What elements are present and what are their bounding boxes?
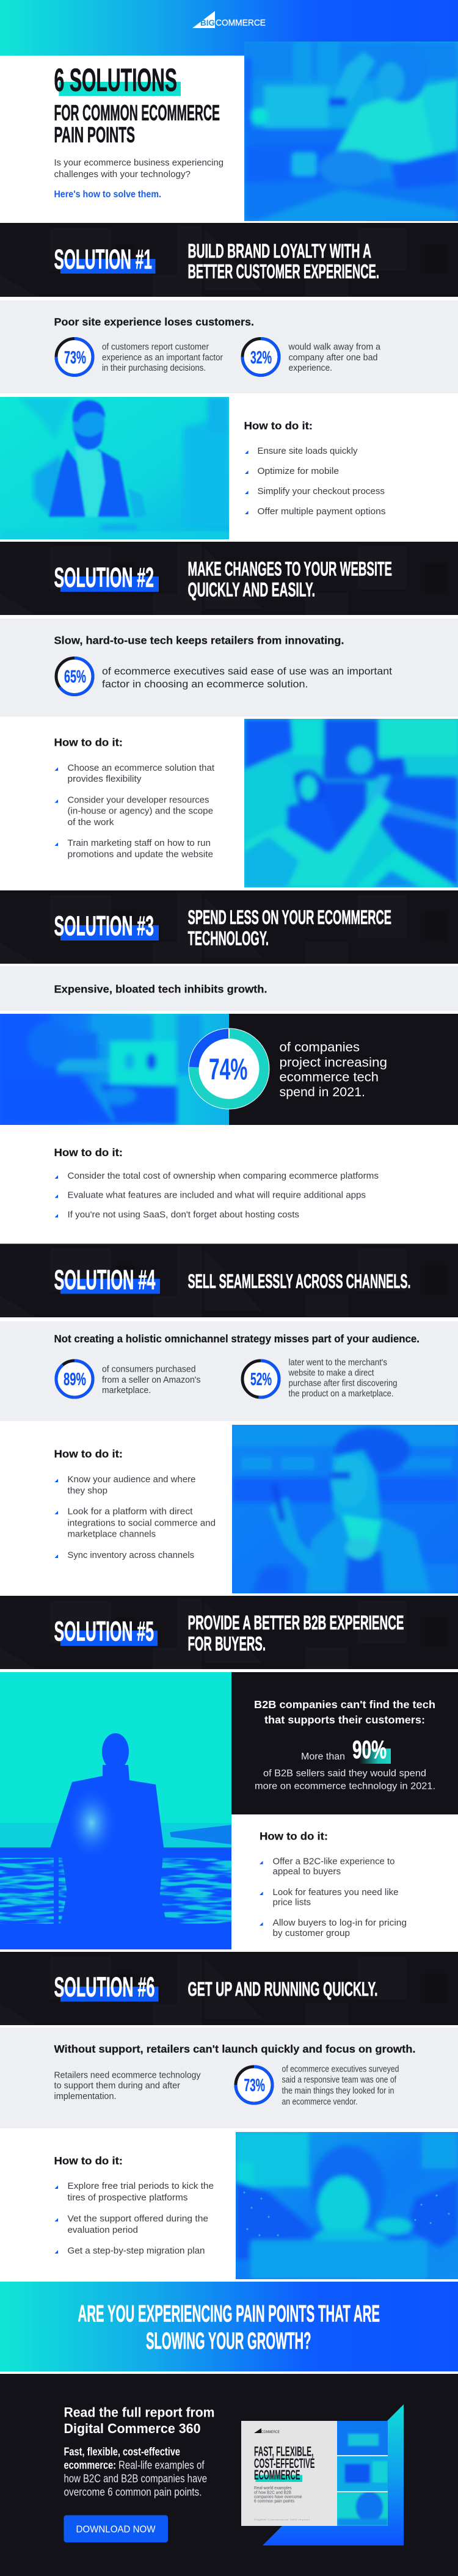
bullet list: Vet the support offered during the — [67, 2213, 208, 2224]
bullet list — [55, 1474, 216, 1560]
bullet list: they shop — [67, 1485, 107, 1496]
bullet list: (in-house or agency) and the scope — [67, 806, 213, 816]
bullet list: marketplace channels — [67, 1529, 156, 1539]
donut 73 percent: 73% — [244, 2076, 265, 2095]
arm — [244, 794, 391, 887]
cover title: FAST, FLEXIBLE, — [254, 2444, 314, 2459]
footer description: Fast, flexible, cost-effective — [64, 2445, 180, 2458]
bullet list: promotions and update the website — [67, 849, 213, 860]
highlight — [60, 1987, 159, 2002]
bullet list: provides flexibility — [67, 774, 142, 784]
header banner with logo — [0, 0, 458, 56]
solution 2 band — [0, 542, 458, 615]
panel heading: Expensive, bloated tech inhibits growth. — [54, 983, 267, 995]
bullet list: Ensure site loads quickly — [258, 446, 358, 456]
heading: How to do it: — [54, 1146, 123, 1159]
stat text 73: of customers report customer — [102, 342, 209, 352]
woman — [293, 771, 324, 807]
glow — [66, 1786, 117, 1860]
panel: how to do it 2 — [54, 737, 215, 860]
stat text: more on ecommerce technology in 2021. — [255, 1781, 435, 1792]
donut 74 percent: 74% — [209, 1053, 248, 1086]
stat text 52: later went to the merchant's — [288, 1357, 387, 1368]
bullet list: Consider your developer resources — [67, 795, 209, 805]
highlight — [60, 259, 155, 274]
footer description: how B2C and B2B companies have — [64, 2472, 207, 2484]
more than: More than — [301, 1752, 345, 1762]
bullet list: by customer group — [272, 1928, 350, 1938]
donut 74 percent — [188, 1028, 270, 1109]
footer heading line 2: Digital Commerce 360 — [64, 2421, 200, 2436]
arm with phone — [269, 1496, 318, 1570]
heading: How to do it: — [54, 737, 123, 749]
face and hair — [333, 1450, 382, 1533]
download button: DOWNLOAD NOW — [76, 2525, 156, 2534]
band pattern — [0, 893, 446, 964]
icon: logo triangle — [192, 11, 215, 28]
stat text 89 — [102, 1364, 200, 1395]
report cover — [241, 2421, 388, 2526]
subtitle line 2: PAIN POINTS — [54, 122, 135, 147]
bullet list: Get a step-by-step migration plan — [67, 2246, 205, 2256]
stat text 52: the product on a marketplace. — [288, 1389, 393, 1399]
highlight — [60, 1279, 160, 1293]
panel heading: Without support, retailers can't launch quickly and focus on growth. — [54, 2043, 415, 2055]
solution 1 band — [0, 223, 458, 297]
stat panel: 74 percent — [188, 1014, 458, 1125]
stat text 52: purchase after first discovering — [288, 1378, 397, 1389]
stat text 32 — [288, 342, 381, 373]
dock — [170, 1825, 231, 1844]
bullet list: Optimize for mobile — [258, 466, 339, 476]
bullet list: Look for features you need like — [272, 1887, 398, 1897]
label: SOLUTION #2 — [54, 562, 154, 593]
man shirt — [336, 79, 458, 165]
cover title: ECOMMERCE — [254, 2467, 300, 2483]
band pattern — [0, 1598, 446, 1669]
intro paragraph line 2: challenges with your technology? — [54, 169, 191, 180]
stat text 74: project increasing — [280, 1055, 387, 1070]
footer panel — [0, 2374, 458, 2576]
solution 6 band — [0, 1952, 458, 2025]
heading: How to do it: — [54, 2155, 123, 2167]
download button — [64, 2515, 168, 2542]
stat text 89: marketplace. — [102, 1385, 151, 1395]
panel: expensive tech — [0, 966, 458, 1011]
bullet list: integrations to social commerce and — [67, 1518, 216, 1528]
footer description: Real-life examples of — [118, 2459, 205, 2471]
bullet list: Allow buyers to log-in for pricing — [272, 1918, 407, 1928]
heading line 2: that supports their customers: — [264, 1714, 425, 1726]
label: SOLUTION #5 — [54, 1616, 154, 1646]
panel heading: Poor site experience loses customers. — [54, 316, 254, 328]
band pattern — [0, 544, 446, 615]
footer description: ecommerce: — [64, 2459, 116, 2471]
sea texture — [0, 1858, 231, 1924]
cover highlight — [255, 2475, 302, 2482]
panel: how to do it 6 — [54, 2155, 214, 2256]
highlight — [60, 1631, 158, 1646]
photo: stressed man at desk — [244, 42, 458, 221]
label: SOLUTION #4 — [54, 1264, 155, 1295]
laptop — [250, 2240, 427, 2279]
cover photos — [337, 2421, 388, 2526]
donut 65 percent — [56, 658, 93, 695]
bullet list: price lists — [272, 1897, 311, 1908]
cover logo — [254, 2428, 261, 2433]
photo: person browsing laptop — [0, 1014, 229, 1125]
label: SOLUTION #6 — [54, 1971, 155, 2003]
heading: How to do it: — [54, 1447, 123, 1460]
cover title — [254, 2444, 315, 2483]
report backdrop — [263, 2404, 404, 2545]
heading line 2: TECHNOLOGY. — [188, 927, 269, 949]
donut 32 percent: 32% — [250, 348, 272, 368]
panel: support — [0, 2028, 458, 2128]
stat text 89: of consumers purchased — [102, 1364, 195, 1374]
cover subtitle — [254, 2486, 302, 2504]
background people — [348, 747, 373, 774]
bullet list — [245, 446, 386, 517]
bullet list: Offer multiple payment options — [258, 506, 386, 517]
hat — [335, 1427, 410, 1474]
stat text: of B2B sellers said they would spend — [263, 1769, 426, 1778]
bullet list: Train marketing staff on how to run — [67, 838, 211, 848]
stat text 32: company after one bad — [288, 352, 377, 363]
title: 6 SOLUTIONS — [54, 62, 177, 98]
solution 5 band — [0, 1596, 458, 1669]
call to action banner — [0, 2282, 458, 2371]
stat text 73: the main things they looked for in — [282, 2086, 394, 2096]
stat text 73 — [102, 342, 223, 373]
face — [318, 2176, 369, 2239]
logo BIG: BIG — [200, 18, 215, 27]
photo: woman with phone — [232, 1425, 458, 1593]
bullet list: Explore free trial periods to kick the — [67, 2181, 214, 2191]
bullet list: evaluation period — [67, 2225, 138, 2235]
body — [269, 2229, 427, 2279]
cover subtitle: companies have overcome — [254, 2495, 302, 2499]
stat text 32: would walk away from a — [288, 342, 381, 352]
shirt — [75, 446, 105, 517]
stat text 73: said a responsive team was one of — [282, 2075, 397, 2085]
stat text 65 — [102, 666, 392, 690]
bullet list — [55, 1171, 379, 1220]
cover subtitle: 6 common pain points — [254, 2499, 294, 2504]
donut 65 percent: 65% — [64, 667, 86, 686]
bullet list: Simplify your checkout process — [258, 486, 385, 497]
donut 73 percent — [236, 2067, 272, 2103]
90 percent: 90% — [352, 1735, 387, 1764]
stat text 74 — [280, 1041, 387, 1099]
stat text 73: in their purchasing decisions. — [102, 363, 206, 373]
donut 89 percent: 89% — [64, 1370, 86, 1389]
bullet list — [55, 2181, 214, 2256]
photo: man on phone — [0, 397, 229, 539]
head — [73, 402, 104, 447]
bullet list: Look for a platform with direct — [67, 1506, 193, 1517]
label: SOLUTION #1 — [54, 244, 152, 275]
label: SOLUTION #3 — [54, 910, 154, 942]
man head — [244, 757, 293, 843]
stat text 74: of companies — [280, 1041, 360, 1054]
title highlight — [59, 82, 181, 96]
stat text 52: website to make a direct — [288, 1368, 374, 1378]
band pattern — [0, 1246, 446, 1317]
donut 73 percent — [56, 338, 93, 375]
stat text 73: of ecommerce executives surveyed — [282, 2064, 399, 2074]
heading line 2: QUICKLY AND EASILY. — [188, 579, 315, 601]
rail — [0, 1847, 231, 1858]
bullet list: If you're not using SaaS, don't forget about hosting costs — [67, 1209, 299, 1220]
photo: people at computers — [244, 719, 458, 887]
panel: B2B stat — [231, 1672, 458, 1814]
heading line 2: FOR BUYERS. — [188, 1633, 266, 1655]
intro text — [54, 2070, 201, 2101]
heading: B2B companies can't find the tech — [254, 1698, 435, 1711]
stat text 74: ecommerce tech — [280, 1070, 379, 1085]
footer description: overcome 6 common pain points. — [64, 2486, 202, 2498]
bullet list: Consider the total cost of ownership when comparing ecommerce platforms — [67, 1171, 379, 1181]
highlight — [60, 577, 159, 592]
heading: How to do it: — [244, 420, 313, 432]
panel: how to do it 1 — [244, 420, 386, 517]
logo wordmark: COMMERCE — [216, 18, 266, 28]
bullet list: Offer a B2C-like experience to — [272, 1857, 394, 1866]
band pattern — [0, 225, 446, 296]
panel: poor site experience — [0, 300, 458, 393]
highlight — [60, 925, 159, 941]
panel: how to do it 4 — [54, 1447, 216, 1560]
bullet list — [55, 763, 215, 860]
cover subtitle: of how B2C and B2B — [254, 2490, 291, 2495]
hand — [319, 150, 383, 186]
report cover: COMMERCE — [261, 2431, 280, 2434]
donut 52 percent — [242, 1361, 279, 1397]
hair — [311, 2145, 385, 2233]
bullet list: Choose an ecommerce solution that — [67, 763, 215, 773]
cover title: COST-EFFECTIVE — [254, 2456, 315, 2471]
bullet list: Know your audience and where — [67, 1474, 195, 1485]
stat text 32: experience. — [288, 363, 332, 373]
footer heading: Read the full report from — [64, 2405, 215, 2420]
donut 89 percent — [56, 1361, 93, 1397]
call to read: Here's how to solve them. — [54, 189, 161, 200]
footer description — [64, 2445, 207, 2498]
bullet list: tires of prospective platforms — [67, 2192, 188, 2203]
photo: silhouette by the water — [0, 1672, 231, 1949]
subtitle line 1: FOR COMMON ECOMMERCE — [54, 100, 220, 125]
jacket — [305, 1515, 431, 1593]
intro text: implementation. — [54, 2091, 116, 2101]
intro paragraph: Is your ecommerce business experiencing — [54, 158, 224, 168]
sleeve left — [34, 455, 61, 517]
solution 3 band — [0, 890, 458, 964]
bullet list: Evaluate what features are included and what will require additional apps — [67, 1190, 366, 1201]
stat text — [255, 1769, 435, 1792]
stat text 52 — [288, 1357, 397, 1399]
panel: omnichannel — [0, 1322, 458, 1421]
silhouette — [49, 1733, 172, 1949]
donut 73 percent: 73% — [64, 348, 86, 368]
bullet list — [260, 1857, 407, 1938]
panel: slow tech — [0, 619, 458, 717]
panel: how to do it 3 — [54, 1146, 379, 1220]
neck lace — [342, 1515, 382, 1563]
photo: relaxed woman — [236, 2132, 458, 2279]
band pattern — [0, 1954, 446, 2025]
sleeves — [236, 2181, 318, 2260]
stat text 65: of ecommerce executives said ease of use was an important — [102, 666, 392, 677]
panel heading: Slow, hard-to-use tech keeps retailers from innovating. — [54, 634, 344, 646]
panel: how to do it 5 — [260, 1830, 407, 1938]
bullet list: Sync inventory across channels — [67, 1550, 194, 1560]
intro text: Retailers need ecommerce technology — [54, 2070, 201, 2080]
head — [379, 42, 427, 103]
raised arm — [330, 52, 376, 110]
donut 52 percent: 52% — [250, 1370, 272, 1389]
cover subtitle: Real-world examples — [254, 2486, 292, 2490]
bullet list: of the work — [67, 817, 114, 828]
banner headline line 2: SLOWING YOUR GROWTH? — [146, 2328, 311, 2354]
stat text 73: experience as an important factor — [102, 352, 223, 363]
intro text: to support them during and after — [54, 2080, 180, 2091]
panel heading: Not creating a holistic omnichannel strategy misses part of your audience. — [54, 1333, 420, 1345]
title block — [54, 62, 224, 200]
hand — [128, 489, 147, 518]
highlight 90 — [359, 1748, 391, 1764]
donut 32 percent — [242, 338, 279, 375]
cover footnote: Digital Commerce 360 report — [254, 2518, 311, 2521]
heading: How to do it: — [260, 1830, 328, 1842]
stat text 73: an ecommerce vendor. — [282, 2097, 358, 2107]
solution 4 band — [0, 1243, 458, 1317]
bullet list: appeal to buyers — [272, 1866, 341, 1877]
jacket — [49, 449, 89, 517]
stat text 73 — [282, 2064, 399, 2107]
stat text 74: spend in 2021. — [280, 1085, 365, 1099]
monitors — [311, 782, 366, 843]
stat text 65: factor in choosing an ecommerce solution. — [102, 678, 308, 690]
stat text 89: from a seller on Amazon's — [102, 1375, 200, 1385]
